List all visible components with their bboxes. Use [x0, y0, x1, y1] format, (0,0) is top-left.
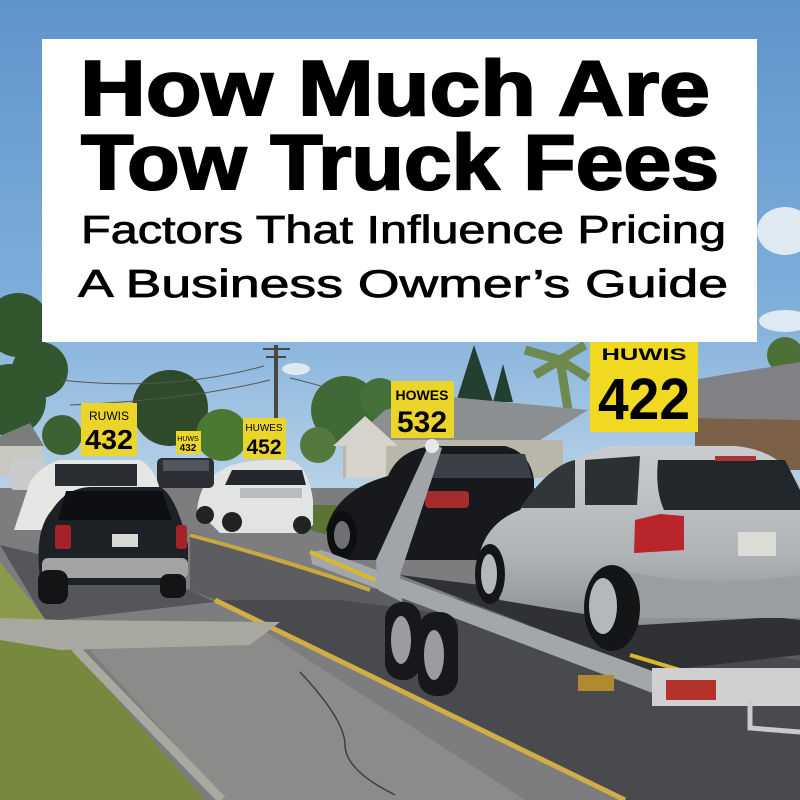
black SUV mid: [326, 446, 534, 560]
white car in distance: [196, 460, 313, 534]
sign: 532: [391, 381, 454, 439]
pavement lower: [90, 622, 525, 800]
utility pole: [60, 345, 350, 430]
far white car: [10, 458, 44, 490]
background: sky: [0, 0, 800, 500]
shaded curb edge: [0, 545, 215, 620]
tow truck flatbed and silver car: [310, 439, 800, 732]
white SUV behind: [14, 460, 160, 530]
yellow road edge line: [215, 600, 625, 800]
distant grass strip: [310, 505, 345, 540]
title line 2: Tow Truck Fees: [81, 118, 719, 206]
yellow straps: [310, 552, 680, 670]
road base: [0, 488, 800, 800]
sign: small: [176, 431, 201, 454]
tree left foreground: [0, 293, 68, 436]
sign: small: HUWS: [177, 436, 199, 443]
asphalt mid lane: [190, 532, 800, 800]
asphalt right lane: [215, 600, 800, 800]
sign: 452: [243, 418, 286, 459]
sign: small: 432: [180, 443, 197, 454]
subtitle line 1: Factors That Influence Pricing: [81, 209, 726, 252]
sign: 432: [81, 403, 137, 456]
sign: 452: 452: [246, 436, 282, 459]
car wheels: [584, 565, 640, 651]
road crack: [300, 672, 395, 795]
sign: 532: HOWES: [396, 387, 448, 403]
silver hatchback: [475, 446, 800, 651]
sign: 452: HUWES: [245, 423, 283, 434]
sign: 422 large: [590, 342, 698, 432]
truck arm: [376, 442, 442, 602]
truck rear wheels: [385, 602, 458, 696]
grass verge: [0, 562, 280, 800]
title line 1: How Much Are: [80, 44, 710, 132]
flatbed deck: [400, 575, 800, 672]
flatbed ramp: [310, 550, 655, 694]
sign: 422 large: 422: [598, 367, 690, 432]
black sedan foreground left: [38, 487, 188, 604]
sign: 432: RUWIS: [89, 409, 129, 423]
dark distant car: [157, 458, 214, 488]
title panel: [42, 39, 757, 342]
sign: 422 large: HUWIS: [602, 345, 686, 364]
sign: 432: 432: [85, 424, 133, 455]
truck rear bumper: [652, 668, 800, 706]
background trees: [42, 337, 800, 463]
clouds: [282, 207, 800, 375]
sign: 532: 532: [397, 406, 447, 439]
subtitle line 2: A Business Owmer’s Guide: [78, 263, 728, 306]
road line: [190, 535, 370, 590]
houses: [0, 362, 800, 478]
